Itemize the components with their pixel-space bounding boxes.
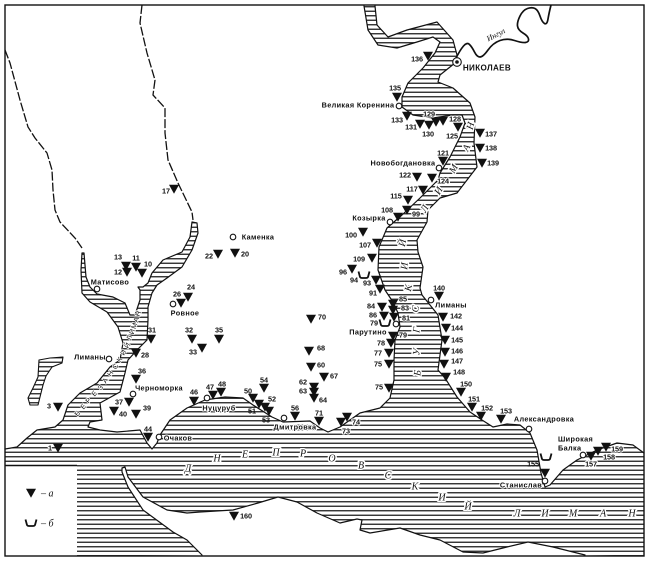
- water: isolated lagoon on the west: [28, 357, 63, 405]
- kurgan sites: Bug east bank: 140: [433, 284, 445, 292]
- estuary name: Dnieper-Bug letters: И: [437, 492, 446, 504]
- kurgan sites: Bug east bank: 145: [451, 336, 463, 344]
- kurgan sites: Bug north: 125: [446, 132, 458, 140]
- kurgan sites: Bug west bank: 81: [402, 314, 410, 322]
- kurgan sites: Bug west bank: 85: [399, 294, 407, 304]
- coastline: east bank of the Bug: [375, 6, 644, 487]
- kurgan sites: Bug west bank: 84: [367, 302, 376, 310]
- kurgan sites: inland centre: 60: [317, 360, 325, 370]
- kurgan sites: Bug west bank: 109: [353, 254, 365, 264]
- kurgan sites: Bug north: 108: [381, 206, 393, 214]
- kurgan sites: Kinburn east: 158: [603, 452, 615, 462]
- kurgan sites: Bug north: 133: [391, 116, 403, 124]
- estuary name: Berezan: И: [129, 328, 137, 336]
- kurgan sites: Bug west bank: 94: [350, 276, 359, 284]
- kurgan sites: south coast centre: 54: [260, 376, 269, 384]
- kurgan sites: south coast west: 46: [190, 388, 198, 396]
- estuary name: Bug letters: А: [460, 142, 474, 154]
- kurgan sites: Bug east bank: 151: [468, 394, 480, 404]
- estuary name: Dnieper-Bug letters: К: [411, 482, 420, 492]
- kurgan sites: Bug west bank: 86: [369, 310, 377, 320]
- town: Matisovo: [91, 278, 129, 292]
- kurgan sites: south coast west: 44: [144, 424, 153, 434]
- kurgan sites: south coast west: 39: [143, 404, 151, 412]
- estuary name: Berezan: Е: [80, 403, 88, 411]
- estuary name: Berezan: А: [102, 377, 110, 385]
- town: Limany west: Лиманы: [74, 352, 106, 362]
- estuary name: Berezan: Й: [122, 341, 132, 350]
- kurgan sites: south coast centre: 53: [262, 416, 270, 424]
- kurgan sites: Bug east bank: 153: [500, 406, 512, 416]
- kurgan sites: north steppe: 31: [148, 326, 156, 334]
- coastline: south shore and spit: [122, 467, 585, 555]
- estuary name: Dnieper-Bug letters: П: [271, 448, 280, 458]
- dashed boundary west: [5, 50, 82, 248]
- kurgan sites: south coast centre: 51: [248, 406, 256, 416]
- kurgan sites: Bug west bank: 79: [399, 330, 407, 340]
- city: Nikolaev: НИКОЛАЕВ: [463, 64, 511, 72]
- town: Aleksandrovka: [514, 414, 575, 432]
- town: Limany east: [428, 297, 467, 310]
- town: Dmitrovka: [274, 415, 317, 432]
- kurgan sites: Bug west bank: 75: [375, 382, 383, 392]
- estuary name: Bug letters: К: [403, 282, 415, 293]
- kurgan sites: Bug west bank: 96: [339, 268, 347, 276]
- kurgan sites: south coast west: 47: [206, 382, 214, 392]
- estuary name: Bug letters: Н: [464, 120, 477, 132]
- kurgan sites: north steppe: 11: [132, 254, 140, 262]
- kurgan sites: Bug east bank: 148: [453, 368, 465, 376]
- kurgan sites: Bug east bank: 147: [451, 356, 463, 366]
- kurgan sites: south coast centre: 71: [315, 408, 323, 418]
- estuary name: Bug letters: У: [411, 347, 423, 356]
- estuary name: Dnieper-Bug letters: Н: [212, 454, 221, 464]
- town: Shirokaya Balka: Широкая: [558, 434, 593, 444]
- legend box: [5, 466, 77, 556]
- town: Aleksandrovka: Александровка: [514, 414, 575, 424]
- kurgan sites: north steppe: 26: [173, 290, 181, 298]
- estuary name: Berezan: Б: [74, 410, 82, 418]
- estuary name: Bug letters: Л: [418, 202, 432, 216]
- kurgan sites: Bug west bank: 78: [377, 338, 385, 348]
- estuary name: Bug letters: [396, 120, 477, 377]
- estuary name: Dnieper-Bug letters: Р: [299, 448, 306, 460]
- kurgan sites: Bug north: 99: [412, 210, 420, 218]
- kurgan sites: Bug east bank: 144: [451, 324, 464, 332]
- kurgan sites: Bug west bank: 93: [363, 278, 371, 288]
- kurgan sites: south coast west: 1: [48, 444, 52, 452]
- estuary name: Dnieper-Bug letters: И: [540, 508, 549, 520]
- kurgan sites: inland centre: [299, 312, 338, 404]
- estuary name: Berezan: М: [131, 322, 139, 330]
- estuary name: Berezan: [74, 310, 143, 418]
- kurgan sites: Bug north: 124: [437, 176, 450, 186]
- town: Kozyrka: Козырка: [352, 214, 386, 222]
- estuary name: Berezan: И: [120, 349, 128, 357]
- kurgan sites: Kinburn east: 159: [611, 444, 623, 454]
- town: Rovnoe: Ровное: [171, 308, 199, 318]
- kurgan sites: Bug north: [381, 52, 499, 222]
- estuary name: Berezan: Е: [91, 390, 99, 398]
- kurgan sites: south coast centre: 56: [291, 404, 299, 412]
- kurgan sites: Bug west bank: 79: [370, 318, 378, 328]
- town: Chernomorka: Черноморка: [135, 384, 184, 392]
- kurgan sites: inland centre: 63: [299, 386, 307, 396]
- town: Matisovo: Матисово: [91, 278, 129, 286]
- kurgan sites: Bug west bank: 77: [374, 348, 382, 358]
- town: Parutino: [349, 321, 399, 336]
- kurgan sites: Bug north: 136: [411, 54, 423, 64]
- kurgan sites: Bug west bank: 91: [369, 288, 377, 298]
- kurgan sites: Bug north: 122: [399, 170, 411, 180]
- kurgan sites: north steppe: 12: [114, 268, 122, 276]
- town: Novobogdanovka: [371, 158, 442, 171]
- estuary name: Bug letters: Й: [396, 238, 409, 249]
- kurgan sites: south coast centre: 74: [352, 418, 361, 426]
- kurgan sites: north steppe: 24: [187, 282, 196, 292]
- town: Chernomorka: [130, 384, 184, 397]
- kurgan sites: north steppe: [114, 185, 249, 360]
- kurgan sites: Bug north: 137: [485, 130, 497, 138]
- estuary name: Berezan: С: [112, 363, 120, 371]
- dashed boundary east: [140, 5, 193, 220]
- estuary name: Dnieper-Bug letters: В: [358, 460, 364, 472]
- kurgan sites: south coast centre: 73: [342, 426, 350, 436]
- kurgan sites: Bug north: 121: [437, 148, 449, 158]
- kurgan sites: Bug east bank: 142: [450, 312, 462, 320]
- estuary name: Berezan: Н: [107, 370, 115, 378]
- estuary name: Bug letters: Б: [412, 369, 424, 377]
- Ingul river: [455, 5, 551, 60]
- kurgan sites: inland centre: 62: [299, 378, 307, 386]
- kurgan sites: Kinburn east: 157: [585, 460, 597, 468]
- town: Ochakov: Очаков: [164, 434, 192, 442]
- kurgan sites: south coast west: [47, 366, 226, 453]
- kurgan sites: Bug west bank: 100: [345, 230, 357, 240]
- town: Nutsurub: [202, 395, 236, 412]
- town: Shirokaya Balka: [558, 434, 593, 458]
- kurgan sites: north steppe: 33: [189, 348, 197, 356]
- kurgan sites: north steppe: 32: [185, 326, 193, 334]
- town: Rovnoe: [170, 301, 199, 318]
- town: Nutsurub: Нуцуруб: [202, 404, 236, 412]
- legend: b: – б: [40, 518, 54, 530]
- kurgan sites: Bug north: 131: [405, 122, 417, 132]
- kurgan sites: north steppe: 17: [162, 186, 170, 196]
- kurgan sites: Bug east bank: [433, 284, 512, 424]
- kurgan sites: north steppe: 35: [215, 326, 223, 334]
- kurgan sites: Kinburn east: 155: [527, 460, 539, 468]
- town: Dmitrovka: Дмитровка: [274, 422, 317, 432]
- kurgan sites: south coast west: 3: [47, 402, 51, 410]
- estuary name: Dnieper-Bug letters: М: [568, 508, 578, 520]
- kurgan sites: south coast centre: 52: [268, 394, 276, 404]
- estuary name: Berezan: А: [133, 316, 141, 323]
- kurgan sites: south coast west: 36: [138, 366, 146, 376]
- kurgan sites: Bug north: 128: [449, 114, 461, 124]
- kurgan sites: inland centre: 70: [318, 312, 326, 322]
- estuary name: Bug letters: С: [410, 304, 422, 313]
- town: Parutino: Парутино: [349, 328, 387, 336]
- kurgan sites: Bug north: 138: [485, 144, 497, 152]
- estuary name: Berezan: З: [97, 384, 105, 392]
- estuary name: Dnieper-Bug letters: Е: [241, 450, 248, 460]
- kurgan sites: Bug north: 139: [487, 158, 499, 168]
- kurgan sites: south coast west: 40: [119, 410, 127, 418]
- town: Limany east: Лиманы: [435, 300, 467, 310]
- kurgan sites: Bug west bank: 83: [401, 304, 409, 312]
- kurgan sites: Bug north: 117: [406, 184, 418, 194]
- estuary name: Berezan: К: [116, 356, 125, 364]
- kurgan sites: inland centre: 67: [330, 372, 338, 380]
- estuary name: Bug letters: И: [399, 261, 411, 271]
- town: Kozyrka: [352, 214, 393, 225]
- kurgan sites: Bug east bank: 146: [451, 346, 463, 356]
- town: Stanislav: Станислав: [500, 480, 542, 490]
- kurgan sites: Bug north: 129: [423, 110, 435, 118]
- estuary name: Dnieper-Bug letters: [184, 448, 636, 520]
- city: Nikolaev: [453, 58, 511, 72]
- estuary name: Dnieper-Bug letters: Н: [627, 508, 636, 520]
- kurgan sites: north steppe: 13: [114, 252, 122, 262]
- kurgan sites: Kinburn east: [229, 443, 623, 521]
- town: Kamenka: Каменка: [242, 232, 275, 242]
- legend: a: – а: [40, 488, 54, 500]
- estuary name: Berezan: Л: [126, 334, 134, 341]
- town: Velikaya Korenikha: Великая Коренина: [322, 100, 395, 110]
- kurgan sites: north steppe: 20: [241, 250, 249, 258]
- kurgan sites: south coast centre: [244, 376, 361, 436]
- estuary name: Bug letters: И: [432, 184, 446, 198]
- kurgan sites: south coast west: 48: [218, 380, 226, 388]
- kurgan sites: Bug west bank: [339, 228, 410, 393]
- kurgan sites: inland centre: 64: [319, 396, 328, 404]
- kurgan sites: Bug east bank: 152: [481, 404, 493, 412]
- kurgan sites: south coast centre: 50: [244, 386, 252, 396]
- kurgan sites: south coast west: 37: [115, 398, 123, 406]
- kurgan sites: Bug north: 115: [390, 192, 402, 200]
- kurgan sites: north steppe: 28: [141, 350, 149, 360]
- kurgan sites: Bug west bank: 75: [374, 360, 382, 368]
- kurgan sites: Kinburn east: 160: [240, 512, 252, 520]
- river name: Ингул: [484, 26, 507, 44]
- kurgan sites: Bug north: 130: [422, 130, 434, 138]
- kurgan sites: Bug north: 135: [389, 84, 401, 92]
- kurgan sites: north steppe: 10: [144, 260, 152, 268]
- estuary name: Dnieper-Bug letters: Й: [463, 500, 472, 512]
- estuary name: Dnieper-Bug letters: О: [328, 454, 336, 464]
- estuary name: Dnieper-Bug letters: С: [385, 470, 392, 482]
- estuary name: Dnieper-Bug letters: Д: [184, 464, 192, 474]
- kurgan sites: inland centre: 68: [317, 344, 325, 352]
- estuary name: Dnieper-Bug letters: Л: [513, 508, 522, 520]
- estuary name: Berezan: Н: [135, 310, 143, 318]
- kurgan sites: Bug east bank: 150: [460, 380, 472, 388]
- estuary name: Bug letters: М: [447, 162, 461, 176]
- town: Shirokaya Balka: Балка: [558, 444, 582, 452]
- estuary name: Dnieper-Bug letters: А: [599, 508, 607, 520]
- estuary name: Berezan: Р: [85, 397, 93, 405]
- estuary name: Bug letters: Г: [411, 326, 423, 334]
- coastline: west and north shore: [5, 6, 465, 449]
- kurgan sites: Bug west bank: 107: [359, 240, 371, 250]
- kurgan sites: north steppe: 22: [205, 252, 213, 260]
- town: Novobogdanovka: Новобогдановка: [371, 158, 436, 168]
